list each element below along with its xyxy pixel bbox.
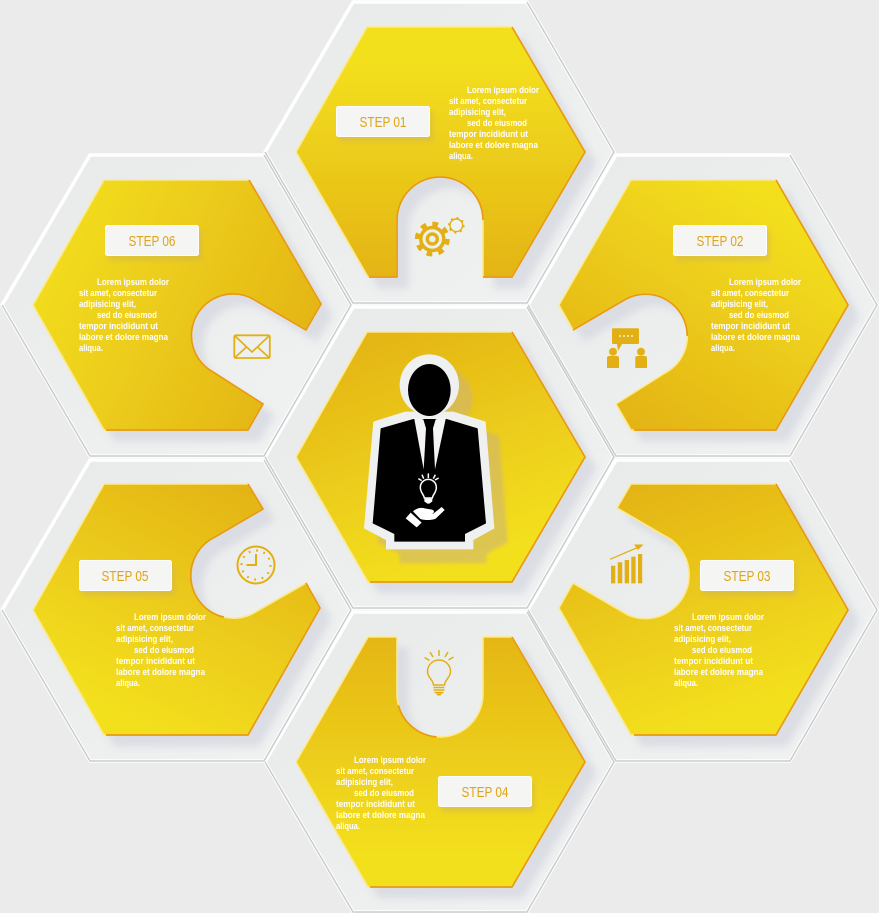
text block 01: adipisicing elit, [449,106,506,117]
icon: envelope [234,335,270,358]
text block 03: labore et dolore magna [674,666,764,677]
text block 02: labore et dolore magna [711,331,801,342]
text block 05: Lorem ipsum dolor [134,611,206,622]
text block 02: sed do eiusmod [729,309,789,320]
text block 01: labore et dolore magna [449,139,539,150]
text block 01: aliqua. [449,150,473,161]
icon: rising bar chart [610,544,644,583]
yellow hexagon 06 [33,180,321,430]
label: step 03: STEP 03 [724,568,770,585]
text block 03: sit amet, consectetur [674,622,752,633]
edge highlight centre [370,332,585,582]
text block 02: sit amet, consectetur [711,287,789,298]
label: step 06 [106,226,198,256]
text block 02: aliqua. [711,342,735,353]
text block 04: labore et dolore magna [336,809,426,820]
label: step 01: STEP 01 [360,114,406,131]
text block 03: adipisicing elit, [674,633,731,644]
panel: step 05 [33,484,320,735]
yellow hexagon centre [296,332,585,582]
text block 05: sed do eiusmod [134,644,194,655]
panel: step 06 [33,180,321,430]
text block 04: sit amet, consectetur [336,765,414,776]
text block 04: tempor incididunt ut [336,798,415,809]
text block 03: sed do eiusmod [692,644,752,655]
icon: two people talking [607,328,647,368]
edge highlight 02 [573,180,848,430]
icon: white bulb [418,473,439,504]
text block 06: sit amet, consectetur [79,287,157,298]
text block 04: adipisicing elit, [336,776,393,787]
text block 06: Lorem ipsum dolor [97,276,169,287]
text block 03 [674,611,764,688]
icon: clock [238,546,274,584]
text block 04: aliqua. [336,820,360,831]
text block 04: sed do eiusmod [354,787,414,798]
text block 06: labore et dolore magna [79,331,169,342]
text block 03: aliqua. [674,677,698,688]
text block 02: tempor incididunt ut [711,320,790,331]
text block 06: sed do eiusmod [97,309,157,320]
label: step 05 [80,560,172,590]
yellow hexagon 04 [296,637,585,887]
text block 06 [79,276,169,353]
label: step 01 [336,106,430,136]
text block 04 [336,754,426,831]
label: step 06: STEP 06 [128,233,176,250]
label: step 04 [438,776,532,806]
label: step 04: STEP 04 [462,784,508,801]
text block 02 [711,276,801,353]
panel: step 04 [296,637,585,887]
text block 05 [116,611,206,688]
text block 01: sed do eiusmod [467,117,527,128]
shirt collar beside tie [414,417,446,469]
text block 05: labore et dolore magna [116,666,206,677]
text block 05: tempor incididunt ut [116,655,195,666]
label: step 02 [674,226,766,256]
panel: step 02 [559,180,848,430]
text block 02: adipisicing elit, [711,298,768,309]
text block 06: aliqua. [79,342,103,353]
label: step 05: STEP 05 [102,568,148,585]
figure outline [364,354,494,549]
edge highlight 06 [106,180,321,430]
edge highlight 05 [106,484,320,735]
icon: open hand [406,507,445,527]
text block 06: tempor incididunt ut [79,320,158,331]
text block 05: aliqua. [116,677,140,688]
text block 02: Lorem ipsum dolor [729,276,801,287]
icon: gears [418,218,464,254]
edge highlight 01 [369,27,585,277]
icon: light bulb [424,650,454,696]
figure: businessman [364,354,494,549]
yellow hexagon 03 [559,484,848,735]
label: step 02: STEP 02 [696,233,744,250]
yellow hexagon 01 [296,27,585,277]
text block 01: sit amet, consectetur [449,95,527,106]
yellow hexagon 02 [559,180,848,430]
text block 01: tempor incididunt ut [449,128,528,139]
text block 04: Lorem ipsum dolor [354,754,426,765]
head [408,364,451,416]
text block 03: Lorem ipsum dolor [692,611,764,622]
label: step 03 [700,560,794,590]
text block 05: adipisicing elit, [116,633,173,644]
panel: step 03 [559,484,848,735]
jacket [373,419,486,542]
text block 03: tempor incididunt ut [674,655,753,666]
panel: centre hexagon [296,332,585,582]
text block 01 [449,84,539,161]
panel: step 01 [296,27,585,277]
text block 06: adipisicing elit, [79,298,136,309]
edge highlight 03 [634,484,848,735]
text block 01: Lorem ipsum dolor [467,84,539,95]
edge highlight 04 [370,637,585,887]
yellow hexagon 05 [33,484,320,735]
text block 05: sit amet, consectetur [116,622,194,633]
